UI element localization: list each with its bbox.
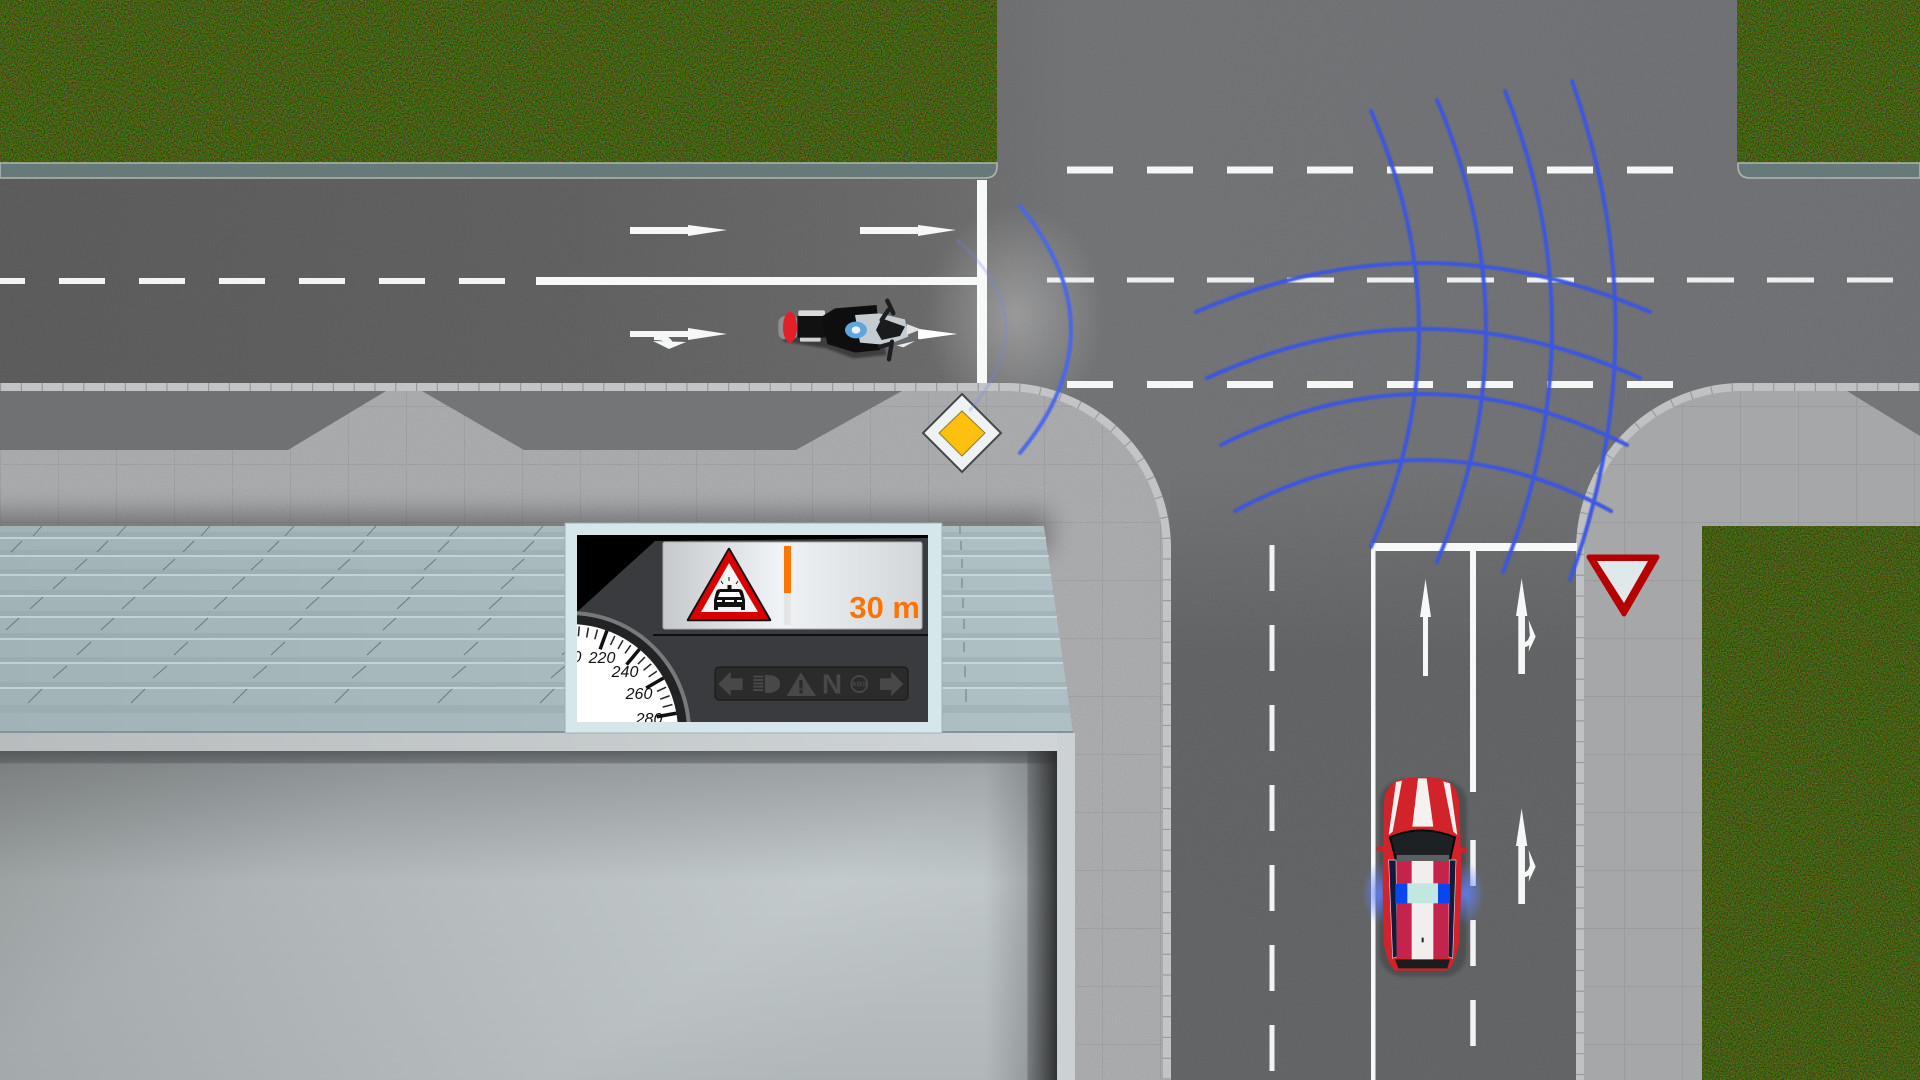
panel frame bbox=[565, 523, 942, 733]
lane arrow: straight and right turn bbox=[630, 328, 727, 349]
priority road sign bbox=[923, 394, 1001, 472]
bottom right grass area bbox=[1702, 526, 1920, 1080]
motorcycle bbox=[778, 301, 957, 359]
right sidewalk with corner kerb and parking bay bbox=[1576, 383, 1920, 1080]
emergency vehicle car bbox=[1362, 777, 1485, 977]
motorcycle signal waves bbox=[957, 206, 1071, 453]
building glass canopy with slats bbox=[0, 526, 1073, 733]
display screen bbox=[663, 542, 922, 629]
top right grass verge bbox=[1737, 0, 1920, 178]
lane arrow: straight and right, lower bbox=[1516, 808, 1536, 904]
speedometer: 260 bbox=[625, 686, 652, 703]
speedometer bbox=[577, 611, 690, 722]
road markings on the vertical road bbox=[1272, 543, 1577, 1080]
lane arrow: straight ahead bbox=[1420, 579, 1431, 676]
lane arrow: straight, upper left bbox=[630, 225, 727, 236]
emergency vehicle signal waves bbox=[1196, 81, 1650, 580]
warning lamp strip: N bbox=[822, 668, 842, 699]
dashboard body bbox=[577, 535, 928, 722]
left sidewalk with corner kerb and parking bays bbox=[0, 383, 1171, 1080]
lane arrow head in front of motorcycle bbox=[918, 329, 957, 339]
warning lamp strip bbox=[715, 667, 908, 700]
yield sign bbox=[1589, 557, 1657, 614]
warning triangle with emergency vehicle bbox=[688, 549, 770, 620]
distance bar bbox=[784, 546, 791, 625]
lane arrow: straight, upper right bbox=[860, 225, 956, 236]
speedometer: 200 bbox=[554, 649, 581, 666]
building interior / roof recess bbox=[0, 733, 1075, 1080]
top left grass verge bbox=[0, 0, 997, 178]
dashboard warning panel bbox=[564, 522, 942, 734]
road markings on the horizontal road bbox=[0, 170, 1893, 384]
speedometer: 220 bbox=[588, 650, 615, 667]
lane arrow: straight and right, upper bbox=[1516, 578, 1536, 674]
speedometer: 240 bbox=[611, 664, 638, 681]
warning lamp strip: ABS bbox=[852, 680, 867, 689]
speedometer: 280 bbox=[635, 711, 662, 728]
distance value: 30 m bbox=[849, 590, 920, 625]
